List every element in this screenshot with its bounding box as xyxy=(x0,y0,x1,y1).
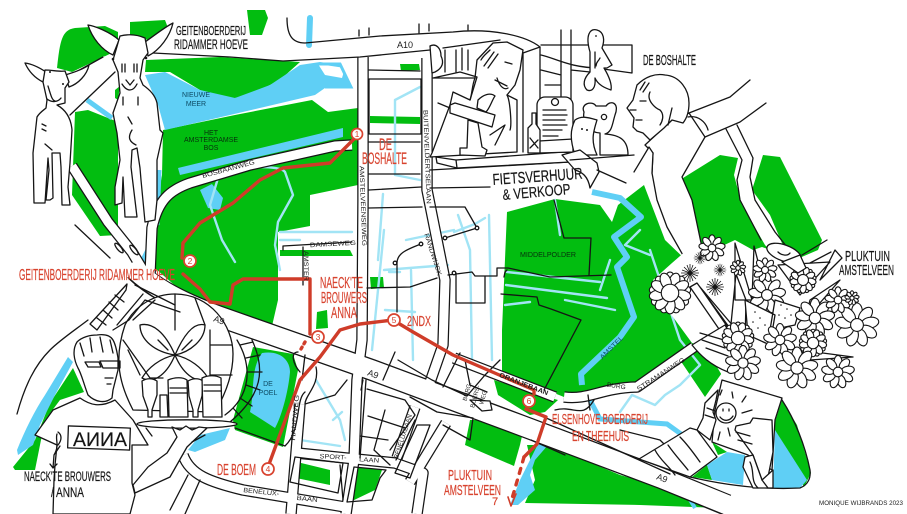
red stop labels: PLUKTUIN xyxy=(448,467,492,484)
map labels: places and streets: HET xyxy=(204,130,219,137)
route stops: numbered markers: 4 xyxy=(266,464,271,474)
route stops: numbered markers: 1 xyxy=(355,129,360,139)
black illustration captions: GEITENBOERDERIJ xyxy=(176,23,246,38)
map labels: places and streets: A9 xyxy=(212,314,226,327)
white road band behind the goats xyxy=(68,56,116,116)
route stops: numbered markers xyxy=(184,128,535,475)
map labels: places and streets: LAAN xyxy=(359,456,380,465)
illustration: woman customer xyxy=(562,74,787,257)
black illustration captions: / ANNA xyxy=(51,484,84,500)
map labels: places and streets: BOSBAANWEG xyxy=(202,159,256,180)
map labels: places and streets: BENELUX- xyxy=(243,487,279,498)
illustration: brewer Anna with tray of beers xyxy=(35,335,237,514)
route stops: numbered markers: 2 xyxy=(188,256,193,266)
map labels: places and streets: BOS xyxy=(204,145,219,152)
red stop labels: 7 xyxy=(492,496,498,508)
illustration: bouquet of flowers xyxy=(643,235,880,397)
red stop labels: AMSTELVEEN xyxy=(444,482,501,499)
black illustration captions: DE BOSHALTE xyxy=(643,52,696,69)
illustration: window shelf with price list, bottle and bears xyxy=(528,30,632,155)
map labels: places and streets: AMSTERDAMSE xyxy=(184,137,238,144)
map labels: places and streets: BOERS- xyxy=(470,385,482,409)
map labels: places and streets xyxy=(182,40,687,504)
map labels: places and streets: DAMSEWEG xyxy=(310,240,356,249)
route stops: numbered markers: 6 xyxy=(527,396,532,406)
route stops: numbered markers: 3 xyxy=(316,332,321,342)
black illustration captions: FIETSVERHUUR xyxy=(492,166,583,189)
red stop labels: BROUWERS xyxy=(321,290,367,307)
map labels: places and streets: BURG xyxy=(606,382,626,391)
map labels: places and streets: SPORT- xyxy=(319,453,347,462)
red stop labels: NAECK'TE xyxy=(320,275,363,292)
map labels: places and streets: NIEUWE xyxy=(182,92,210,99)
illustration: circular flower pattern background xyxy=(90,284,262,422)
red stop labels xyxy=(19,135,648,508)
black illustration captions: & VERKOOP xyxy=(502,181,571,204)
illustration: left goat xyxy=(25,63,89,205)
map labels: places and streets: AMSTEL xyxy=(599,335,625,361)
map labels: places and streets: AMSTER xyxy=(302,251,309,281)
red stop labels: BOSHALTE xyxy=(362,149,407,168)
black illustration captions: NAECK'TE BROUWERS xyxy=(24,468,111,484)
red stop labels: 2NDX xyxy=(407,313,431,330)
map labels: places and streets: RANDWIJCK xyxy=(422,233,443,277)
map labels: places and streets: AMSTELVEENSEWEG xyxy=(358,166,367,246)
illustration: rabbit toy xyxy=(584,30,612,90)
map labels: places and streets: BURG. xyxy=(463,381,473,402)
map labels: places and streets: HANDWEG xyxy=(290,395,301,441)
red stop labels: ELSENHOVE BOERDERIJ xyxy=(552,411,648,428)
map labels: places and streets: DE xyxy=(263,381,273,388)
red stop labels: ANNA xyxy=(331,305,357,322)
map labels: places and streets: MEER xyxy=(186,101,206,108)
map labels: places and streets: A9 xyxy=(366,368,380,381)
black illustration captions: MONIQUE WIJBRANDS 2023 xyxy=(819,500,903,507)
map labels: places and streets: MIDDELPOLDER xyxy=(520,252,576,259)
map labels: places and streets: WEG xyxy=(479,390,489,405)
red stop labels: EN THEEHUIS xyxy=(572,428,629,445)
black illustration captions: RIDAMMER HOEVE xyxy=(174,36,248,52)
illustration: man at bike rental window xyxy=(430,40,570,188)
map labels: places and streets: ORANJEBAAN xyxy=(498,372,549,397)
map labels: places and streets: POEL xyxy=(259,390,277,397)
map labels: places and streets: BENELUXBAAN xyxy=(393,413,414,459)
illustration: paper wrap with sun and holding hands xyxy=(639,380,782,488)
map labels: places and streets: A10 xyxy=(397,40,413,50)
route: red cycling route xyxy=(182,136,546,506)
route stops: numbered markers: 5 xyxy=(392,315,397,325)
illustration: right goat xyxy=(88,23,173,222)
black illustration captions: AИИA xyxy=(73,430,127,451)
map labels: places and streets: BAAN xyxy=(296,495,318,504)
red stop labels: DE BOEM xyxy=(217,462,256,479)
red stop labels: DE xyxy=(379,135,392,154)
red stop labels: GEITENBOERDERIJ RIDAMMER HOEVE xyxy=(19,267,175,284)
map labels: places and streets: A9 xyxy=(655,472,669,485)
map labels: places and streets: STRAMANWEG xyxy=(636,357,687,393)
map labels: places and streets: BUITENVELDERTSELAAN xyxy=(421,110,432,204)
